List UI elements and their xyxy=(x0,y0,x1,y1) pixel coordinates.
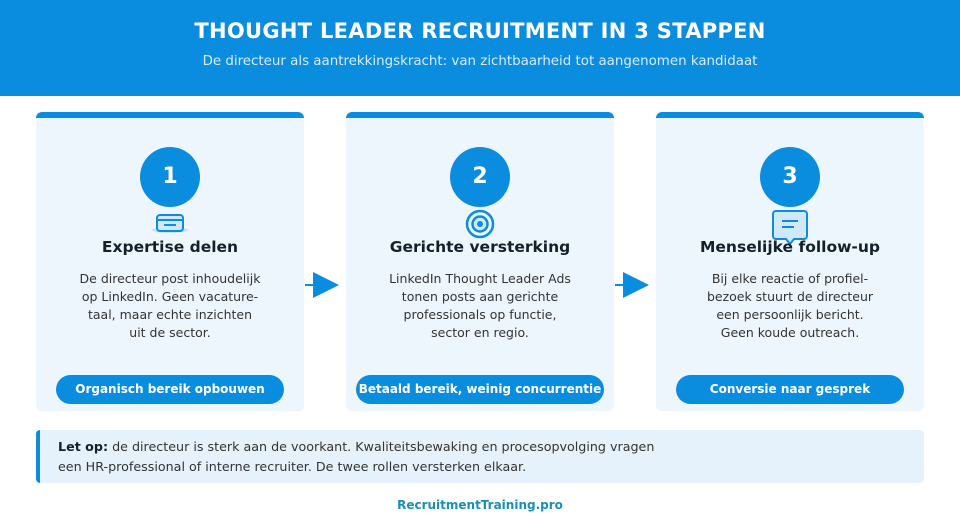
text: De directeur post inhoudelijk xyxy=(80,271,260,286)
icon: chat bubble xyxy=(772,210,808,244)
title: THOUGHT LEADER RECRUITMENT IN 3 STAPPEN xyxy=(194,19,766,43)
text: op LinkedIn. Geen vacature- xyxy=(82,289,258,304)
text xyxy=(707,271,873,340)
arrow 1 xyxy=(305,272,339,298)
number 1: 1 xyxy=(162,164,178,189)
panel: step 3 xyxy=(656,112,924,411)
subtitle: De directeur als aantrekkingskracht: van zichtbaarheid tot aangenomen kandidaat xyxy=(203,54,757,69)
arrow 2 xyxy=(615,272,649,298)
text: uit de sector. xyxy=(129,325,211,340)
callout: note: een HR-professional of interne recruiter. De twee rollen versterken elkaar. xyxy=(58,459,526,474)
pill: Conversie naar gesprek xyxy=(710,382,870,396)
footer: RecruitmentTraining.pro xyxy=(397,498,563,512)
panel: step 1 xyxy=(36,112,304,411)
heading: Expertise delen xyxy=(102,238,238,256)
pill: Betaald bereik, weinig concurrentie xyxy=(359,382,601,396)
callout: note xyxy=(36,430,924,483)
number 2 xyxy=(450,147,510,207)
text: sector en regio. xyxy=(431,325,529,340)
text: Bij elke reactie of profiel- xyxy=(712,271,868,286)
pill xyxy=(676,375,904,404)
text: bezoek stuurt de directeur xyxy=(707,289,873,304)
pill xyxy=(56,375,284,404)
text: tonen posts aan gerichte xyxy=(402,289,558,304)
text: een persoonlijk bericht. xyxy=(716,307,864,322)
heading: Gerichte versterking xyxy=(390,238,570,256)
text: Geen koude outreach. xyxy=(721,325,859,340)
text: taal, maar echte inzichten xyxy=(88,307,252,322)
text xyxy=(389,271,571,340)
header xyxy=(0,0,960,96)
pill xyxy=(356,375,604,404)
text xyxy=(80,271,260,340)
number 2: 2 xyxy=(472,164,488,189)
number 1 xyxy=(140,147,200,207)
number 3: 3 xyxy=(782,164,798,189)
text: professionals op functie, xyxy=(404,307,556,322)
heading: Menselijke follow-up xyxy=(700,238,880,256)
text: LinkedIn Thought Leader Ads xyxy=(389,271,571,286)
icon: target xyxy=(466,210,494,238)
panel: step 2 xyxy=(346,112,614,411)
icon: card xyxy=(152,214,188,233)
number 3 xyxy=(760,147,820,207)
pill: Organisch bereik opbouwen xyxy=(75,382,265,396)
callout: note: Let op: de directeur is sterk aan de voorkant. Kwaliteitsbewaking en procesopvolging vragen xyxy=(58,439,654,454)
